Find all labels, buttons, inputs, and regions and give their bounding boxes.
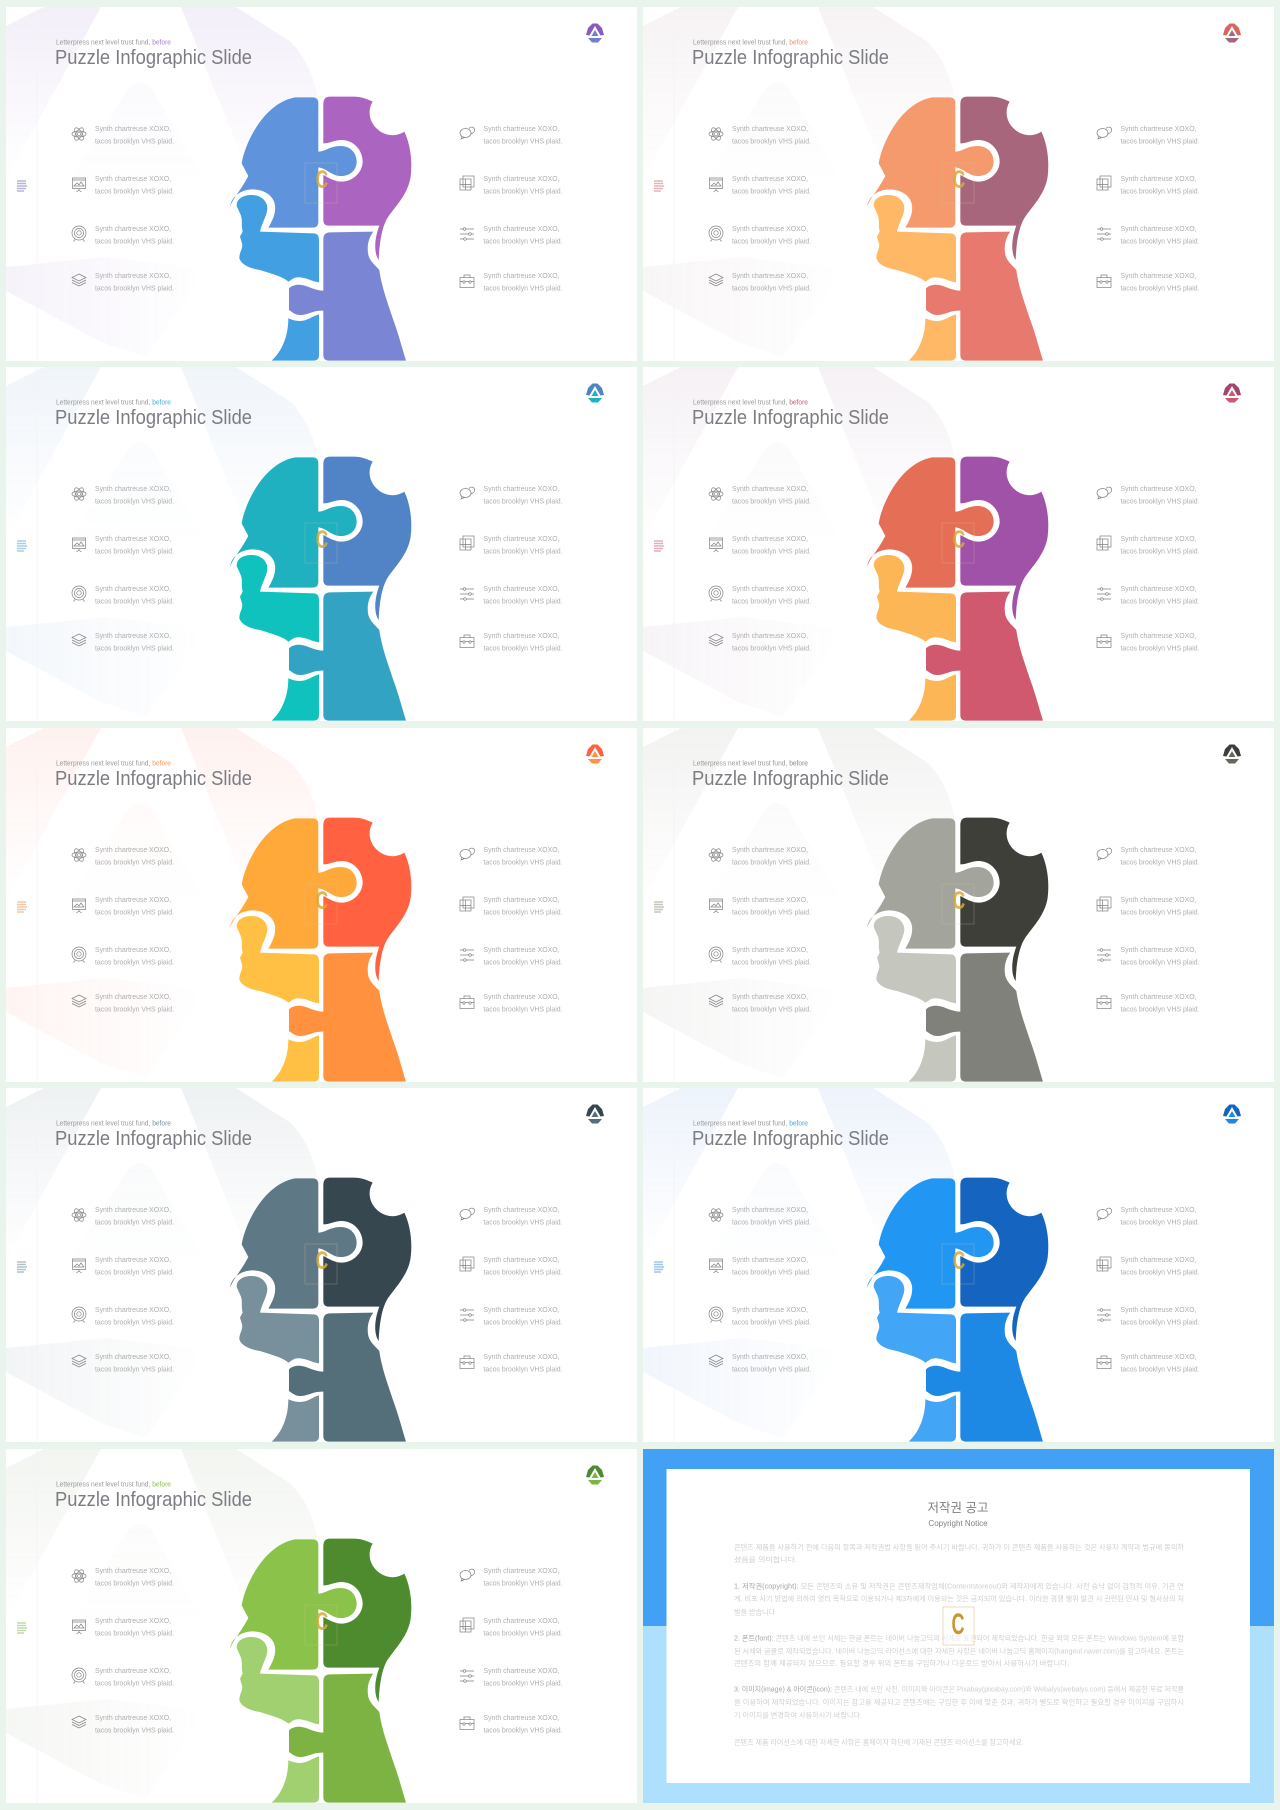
heading [55, 1120, 252, 1150]
left list: tacos brooklyn VHS plaid. [732, 646, 811, 652]
puzzle head [230, 457, 411, 721]
heading [692, 400, 889, 429]
logo [1223, 744, 1241, 764]
right list: Synth chartreuse XOXO, [484, 847, 560, 854]
copyright body text: 콘텐츠 제품을 사용하기 전에 다음의 항목과 저작권법 사항을 읽어 주시기 바랍니다. 귀하가 이 콘텐츠 제품을 사용하는 것은 사용자 계약과 법규에 동의하 [734, 1542, 1185, 1552]
copyright body text: 3. 이미지(image) & 아이콘(icon): 콘텐츠 내에 쓰인 사진, 이미지와 아이콘은 Pixabay(pixabay.com)와 Webalys(webalys.com) 등에서 제공한 무료 저작물 [734, 1684, 1185, 1694]
right list: Synth chartreuse XOXO, [484, 226, 560, 233]
heading: Puzzle Infographic Slide [55, 407, 252, 429]
slide 5: orange [6, 728, 637, 1082]
watermark: C [316, 525, 328, 554]
right list: tacos brooklyn VHS plaid. [484, 1680, 563, 1688]
right list: tacos brooklyn VHS plaid. [484, 498, 563, 506]
left list: Synth chartreuse XOXO, [95, 1568, 171, 1575]
right list: Synth chartreuse XOXO, [1120, 1307, 1197, 1314]
left list: Synth chartreuse XOXO, [95, 273, 171, 280]
copyright body text: 벌을 받습니다. [734, 1608, 777, 1616]
right list: Synth chartreuse XOXO, [1120, 486, 1197, 493]
left list: tacos brooklyn VHS plaid. [95, 646, 174, 652]
puzzle head [867, 97, 1048, 361]
right list: Synth chartreuse XOXO, [484, 897, 560, 904]
right list: Synth chartreuse XOXO, [484, 126, 560, 133]
logo [586, 1466, 604, 1484]
left list: Synth chartreuse XOXO, [732, 176, 808, 183]
right list: tacos brooklyn VHS plaid. [1120, 910, 1200, 916]
left list: tacos brooklyn VHS plaid. [732, 286, 811, 292]
left list [709, 126, 811, 292]
left list: tacos brooklyn VHS plaid. [95, 188, 174, 196]
side icon [17, 902, 27, 912]
copyright title: Copyright Notice [928, 1519, 988, 1528]
left list: Synth chartreuse XOXO, [732, 633, 808, 640]
right list: tacos brooklyn VHS plaid. [484, 138, 563, 146]
left list: tacos brooklyn VHS plaid. [732, 188, 811, 196]
left list: tacos brooklyn VHS plaid. [732, 498, 811, 506]
watermark: C [316, 165, 328, 194]
watermark: C [953, 165, 965, 194]
heading: Puzzle Infographic Slide [55, 768, 252, 790]
heading: Puzzle Infographic Slide [55, 47, 252, 69]
heading [55, 40, 252, 69]
right list: tacos brooklyn VHS plaid. [484, 860, 563, 866]
left list [72, 486, 174, 652]
right list: Synth chartreuse XOXO, [484, 1618, 560, 1625]
copyright title [928, 1501, 988, 1528]
right list [460, 486, 563, 652]
right list [460, 1207, 563, 1374]
left list: tacos brooklyn VHS plaid. [732, 1270, 811, 1276]
right list [1097, 486, 1200, 652]
side icon [17, 541, 27, 551]
right list: Synth chartreuse XOXO, [1120, 994, 1197, 1001]
left list: tacos brooklyn VHS plaid. [732, 1006, 811, 1014]
right list: tacos brooklyn VHS plaid. [1120, 548, 1200, 556]
heading: Letterpress next level trust fund, before [693, 760, 808, 768]
heading: Letterpress next level trust fund, before [56, 40, 171, 46]
left list: tacos brooklyn VHS plaid. [732, 1320, 811, 1326]
right list: tacos brooklyn VHS plaid. [1120, 498, 1200, 506]
watermark: C [316, 1246, 328, 1275]
right list: tacos brooklyn VHS plaid. [1120, 286, 1200, 292]
left list: tacos brooklyn VHS plaid. [95, 1320, 174, 1326]
logo [1223, 1104, 1241, 1124]
left list: Synth chartreuse XOXO, [732, 536, 808, 543]
logo [1223, 24, 1241, 42]
copyright body text: 계, 비포 사기 방법에 의하여 영리 목적으로 이용되거나 제3자에게 이용되는 것은 금지되어 있습니다. 이러한 경쟁 행위 발견 시 관련된 민사 및 형사상의 처 [734, 1594, 1184, 1603]
left list: Synth chartreuse XOXO, [732, 1257, 808, 1264]
watermark: C [953, 525, 965, 554]
left list: tacos brooklyn VHS plaid. [95, 960, 174, 966]
side icon [17, 1623, 27, 1633]
left list: Synth chartreuse XOXO, [95, 1207, 171, 1214]
watermark: C [952, 1609, 965, 1641]
right list: tacos brooklyn VHS plaid. [1120, 960, 1200, 966]
logo [586, 24, 604, 42]
heading: Puzzle Infographic Slide [692, 407, 889, 429]
left list: Synth chartreuse XOXO, [732, 947, 808, 954]
left list [72, 1207, 174, 1374]
copyright body text: 된 서체와 글꼴로 제작되었습니다. 네이버 나눔고딕 라이선스에 대한 자세한 사항은 네이버 나눔고딕 홈페이지(hangeul.naver.com)를 참고하세요. 폰트는 [734, 1646, 1185, 1656]
watermark: C [316, 1607, 328, 1636]
right list: tacos brooklyn VHS plaid. [484, 548, 563, 556]
right list: tacos brooklyn VHS plaid. [484, 1006, 563, 1014]
left list: Synth chartreuse XOXO, [95, 586, 171, 593]
side icon [654, 541, 664, 551]
left list: tacos brooklyn VHS plaid. [95, 1220, 174, 1226]
left list: Synth chartreuse XOXO, [95, 126, 171, 133]
copyright body text: 을 이용하여 제작되었습니다. 이미지는 참고용 제공되고 콘텐츠에는 구입한 후 이에 맞춘 것과, 귀하가 별도로 확인하고 필요할 경우 이미지를 구입하시 [734, 1698, 1184, 1706]
right list: Synth chartreuse XOXO, [1120, 126, 1197, 133]
logo [1223, 384, 1241, 402]
right list: Synth chartreuse XOXO, [484, 1568, 560, 1575]
left list: tacos brooklyn VHS plaid. [732, 138, 811, 146]
right list: tacos brooklyn VHS plaid. [484, 1728, 563, 1734]
slide 6: warm grey [643, 728, 1274, 1082]
left list: Synth chartreuse XOXO, [95, 486, 171, 493]
right list: tacos brooklyn VHS plaid. [1120, 1220, 1200, 1226]
right list: tacos brooklyn VHS plaid. [484, 960, 563, 966]
heading: Letterpress next level trust fund, before [56, 1482, 171, 1488]
side icon [654, 902, 664, 912]
left list: tacos brooklyn VHS plaid. [95, 138, 174, 146]
slide 9: green [6, 1449, 637, 1803]
right list: tacos brooklyn VHS plaid. [484, 598, 563, 606]
right list: Synth chartreuse XOXO, [1120, 847, 1197, 854]
left list: Synth chartreuse XOXO, [95, 994, 171, 1001]
watermark: C [953, 886, 965, 915]
side icon [17, 181, 27, 191]
copyright body text: 2. 폰트(font): 콘텐츠 내에 쓰인 서체는 한글 폰트는 네이버 나눔고딕의 서체로 표현되어 제작되었습니다. 한글 외의 모든 폰트는 Windows System에 포함 [734, 1634, 1185, 1642]
heading: Puzzle Infographic Slide [692, 768, 889, 790]
slide 4: red-orange and violet [643, 367, 1274, 721]
right list: Synth chartreuse XOXO, [1120, 633, 1197, 640]
right list: tacos brooklyn VHS plaid. [484, 646, 563, 652]
heading: Letterpress next level trust fund, before [56, 400, 171, 406]
right list: tacos brooklyn VHS plaid. [484, 1270, 563, 1276]
right list: tacos brooklyn VHS plaid. [484, 1580, 563, 1588]
right list: tacos brooklyn VHS plaid. [1120, 1320, 1200, 1326]
copyright body text: 콘텐츠의 함께 제공되지 않으므로, 필요할 경우 위의 폰트를 구입하거나 다운로드 받아서 사용하시기 바랍니다. [734, 1658, 1069, 1668]
right list: Synth chartreuse XOXO, [484, 176, 560, 183]
right list: Synth chartreuse XOXO, [484, 273, 560, 280]
watermark [942, 523, 974, 563]
left list: tacos brooklyn VHS plaid. [95, 498, 174, 506]
puzzle head [230, 1178, 411, 1442]
left list: tacos brooklyn VHS plaid. [95, 1728, 174, 1734]
logo [586, 1104, 604, 1124]
right list: Synth chartreuse XOXO, [1120, 176, 1197, 183]
watermark: C [316, 886, 328, 915]
heading: Letterpress next level trust fund, before [693, 400, 808, 406]
right list: tacos brooklyn VHS plaid. [1120, 646, 1200, 652]
left list: tacos brooklyn VHS plaid. [95, 548, 174, 556]
right list: Synth chartreuse XOXO, [484, 1668, 560, 1675]
left list: Synth chartreuse XOXO, [732, 897, 808, 904]
left list [709, 1207, 811, 1374]
side icon [654, 1262, 664, 1272]
left list: tacos brooklyn VHS plaid. [732, 598, 811, 606]
left list: tacos brooklyn VHS plaid. [732, 548, 811, 556]
right list [460, 126, 563, 292]
watermark [305, 523, 337, 563]
puzzle head [867, 457, 1048, 721]
right list: tacos brooklyn VHS plaid. [1120, 238, 1200, 246]
watermark [305, 884, 337, 924]
left list: Synth chartreuse XOXO, [732, 847, 808, 854]
heading [55, 400, 252, 429]
heading: Puzzle Infographic Slide [55, 1489, 252, 1511]
right list: tacos brooklyn VHS plaid. [484, 1220, 563, 1226]
left list: tacos brooklyn VHS plaid. [732, 1366, 811, 1374]
watermark [305, 1605, 337, 1645]
right list: Synth chartreuse XOXO, [1120, 947, 1197, 954]
heading: Puzzle Infographic Slide [55, 1128, 252, 1150]
watermark [305, 1244, 337, 1284]
side icon [17, 1262, 27, 1272]
heading [692, 1120, 889, 1150]
right list: tacos brooklyn VHS plaid. [484, 1320, 563, 1326]
left list: Synth chartreuse XOXO, [95, 897, 171, 904]
left list: tacos brooklyn VHS plaid. [732, 860, 811, 866]
heading [692, 40, 889, 69]
left list: Synth chartreuse XOXO, [95, 1354, 171, 1361]
right list: Synth chartreuse XOXO, [1120, 1354, 1197, 1361]
left list: Synth chartreuse XOXO, [95, 176, 171, 183]
left list: tacos brooklyn VHS plaid. [95, 1270, 174, 1276]
left list [709, 486, 811, 652]
slide 1: purple and blue [6, 7, 637, 361]
heading: Puzzle Infographic Slide [692, 1128, 889, 1150]
copyright body text: 콘텐츠 제품 라이선스에 대한 자세한 사항은 홈페이지 하단에 기재된 콘텐츠 라이선스를 참고하세요. [734, 1738, 1024, 1746]
left list: Synth chartreuse XOXO, [732, 1354, 808, 1361]
heading: Letterpress next level trust fund, before [693, 40, 808, 46]
right list: Synth chartreuse XOXO, [1120, 897, 1197, 904]
slide 7: blue grey [6, 1088, 637, 1442]
watermark: C [953, 1246, 965, 1275]
right list: tacos brooklyn VHS plaid. [484, 238, 563, 246]
left list [709, 847, 811, 1014]
right list: Synth chartreuse XOXO, [484, 1715, 560, 1722]
slide 8: bright blue [643, 1088, 1274, 1442]
heading [55, 1482, 252, 1511]
left list: Synth chartreuse XOXO, [95, 1668, 171, 1675]
left list: Synth chartreuse XOXO, [95, 947, 171, 954]
heading [55, 760, 252, 790]
right list: tacos brooklyn VHS plaid. [1120, 1270, 1200, 1276]
right list: Synth chartreuse XOXO, [1120, 536, 1197, 543]
copyright body text [734, 1542, 1185, 1746]
left list: tacos brooklyn VHS plaid. [95, 598, 174, 606]
right list: Synth chartreuse XOXO, [1120, 226, 1197, 233]
watermark [943, 1607, 974, 1645]
left list: Synth chartreuse XOXO, [95, 1618, 171, 1625]
right list: Synth chartreuse XOXO, [484, 994, 560, 1001]
left list: Synth chartreuse XOXO, [95, 1715, 171, 1722]
left list [72, 847, 174, 1014]
right list: tacos brooklyn VHS plaid. [484, 188, 563, 196]
puzzle head [230, 818, 411, 1082]
copyright title: 저작권 공고 [928, 1501, 988, 1515]
copyright notice slide [643, 1449, 1274, 1803]
watermark [942, 884, 974, 924]
watermark [942, 163, 974, 203]
right list [1097, 126, 1200, 292]
right list: tacos brooklyn VHS plaid. [1120, 598, 1200, 606]
left list: tacos brooklyn VHS plaid. [732, 960, 811, 966]
left list: tacos brooklyn VHS plaid. [95, 286, 174, 292]
right list: tacos brooklyn VHS plaid. [1120, 188, 1200, 196]
right list: Synth chartreuse XOXO, [1120, 1257, 1197, 1264]
watermark [942, 1244, 974, 1284]
left list: tacos brooklyn VHS plaid. [732, 238, 811, 246]
right list: Synth chartreuse XOXO, [484, 1207, 560, 1214]
right list: Synth chartreuse XOXO, [484, 947, 560, 954]
left list [72, 126, 174, 292]
slide 2: coral and mauve [643, 7, 1274, 361]
heading: Letterpress next level trust fund, before [56, 760, 171, 768]
logo [586, 384, 604, 402]
right list: tacos brooklyn VHS plaid. [484, 1366, 563, 1374]
left list: tacos brooklyn VHS plaid. [95, 1680, 174, 1688]
left list: Synth chartreuse XOXO, [732, 126, 808, 133]
left list: Synth chartreuse XOXO, [732, 486, 808, 493]
right list: tacos brooklyn VHS plaid. [1120, 138, 1200, 146]
right list: Synth chartreuse XOXO, [484, 586, 560, 593]
left list: Synth chartreuse XOXO, [95, 847, 171, 854]
right list: tacos brooklyn VHS plaid. [1120, 860, 1200, 866]
right list: Synth chartreuse XOXO, [484, 1257, 560, 1264]
right list: Synth chartreuse XOXO, [484, 633, 560, 640]
left list: tacos brooklyn VHS plaid. [95, 910, 174, 916]
left list: Synth chartreuse XOXO, [732, 994, 808, 1001]
right list: Synth chartreuse XOXO, [484, 536, 560, 543]
right list [460, 1568, 563, 1734]
left list: tacos brooklyn VHS plaid. [732, 1220, 811, 1226]
left list: tacos brooklyn VHS plaid. [732, 910, 811, 916]
right list [1097, 847, 1200, 1014]
right list: tacos brooklyn VHS plaid. [1120, 1006, 1200, 1014]
left list: Synth chartreuse XOXO, [732, 586, 808, 593]
heading: Puzzle Infographic Slide [692, 47, 889, 69]
puzzle head [230, 97, 411, 361]
heading: Letterpress next level trust fund, before [56, 1120, 171, 1128]
right list: Synth chartreuse XOXO, [484, 1307, 560, 1314]
left list: Synth chartreuse XOXO, [732, 226, 808, 233]
right list: Synth chartreuse XOXO, [484, 486, 560, 493]
watermark [305, 163, 337, 203]
left list: tacos brooklyn VHS plaid. [95, 860, 174, 866]
left list: tacos brooklyn VHS plaid. [95, 1366, 174, 1374]
right list: Synth chartreuse XOXO, [1120, 586, 1197, 593]
right list [1097, 1207, 1200, 1374]
right list [460, 847, 563, 1014]
heading [692, 760, 889, 790]
copyright body text: 기 이미지를 변경하여 사용하시기 바랍니다. [734, 1710, 862, 1720]
right list: Synth chartreuse XOXO, [484, 1354, 560, 1361]
right list: tacos brooklyn VHS plaid. [484, 910, 563, 916]
left list [72, 1568, 174, 1734]
right list: tacos brooklyn VHS plaid. [484, 1630, 563, 1638]
left list: tacos brooklyn VHS plaid. [95, 1630, 174, 1638]
puzzle head [230, 1539, 411, 1803]
slide 3: teal and blue [6, 367, 637, 721]
right list: Synth chartreuse XOXO, [1120, 273, 1197, 280]
left list: Synth chartreuse XOXO, [732, 1207, 808, 1214]
heading: Letterpress next level trust fund, before [693, 1120, 808, 1128]
left list: Synth chartreuse XOXO, [732, 273, 808, 280]
left list: Synth chartreuse XOXO, [95, 1307, 171, 1314]
left list: tacos brooklyn VHS plaid. [95, 238, 174, 246]
left list: Synth chartreuse XOXO, [95, 226, 171, 233]
left list: Synth chartreuse XOXO, [95, 1257, 171, 1264]
right list: tacos brooklyn VHS plaid. [484, 286, 563, 292]
right list: tacos brooklyn VHS plaid. [1120, 1366, 1200, 1374]
copyright body text: 셨음을 의미합니다. [734, 1555, 797, 1564]
logo [586, 744, 604, 764]
puzzle head [867, 1178, 1048, 1442]
left list: Synth chartreuse XOXO, [95, 536, 171, 543]
left list: tacos brooklyn VHS plaid. [95, 1006, 174, 1014]
left list: Synth chartreuse XOXO, [732, 1307, 808, 1314]
side icon [654, 181, 664, 191]
puzzle head [867, 818, 1048, 1082]
left list: Synth chartreuse XOXO, [95, 633, 171, 640]
right list: Synth chartreuse XOXO, [1120, 1207, 1197, 1214]
left list: tacos brooklyn VHS plaid. [95, 1580, 174, 1588]
copyright body text: 1. 저작권(copyright): 모든 콘텐츠의 소유 및 저작권은 콘텐츠제작업체(Contentstoreout)와 제작자에게 있습니다. 사전 승낙 없이 감정적 이유, 기관 연 [734, 1582, 1184, 1590]
